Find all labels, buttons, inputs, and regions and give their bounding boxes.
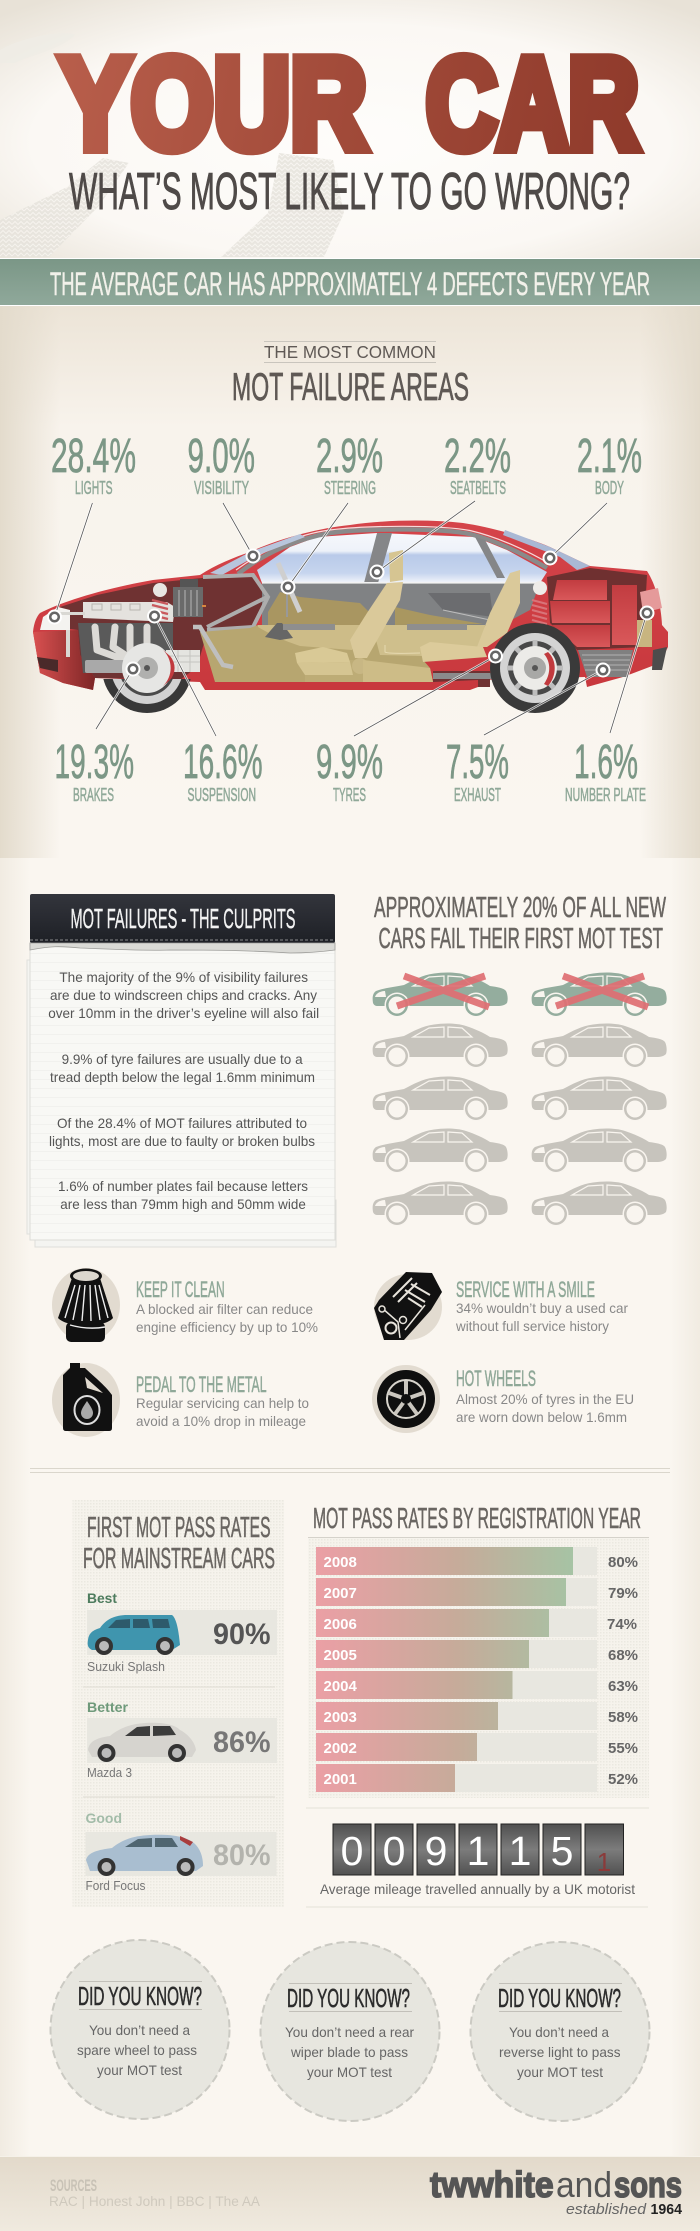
callout: did you know 3: DID YOU KNOW? <box>498 1985 621 2013</box>
bar 2002: 2002 <box>324 1740 357 1757</box>
tip: service with a smile <box>455 1277 628 1334</box>
stat: number plate <box>565 736 646 805</box>
logo: established <box>566 2201 647 2218</box>
stat: seatbelts: SEATBELTS <box>450 478 506 498</box>
tip: keep it clean: KEEP IT CLEAN <box>136 1277 225 1302</box>
callout: did you know 3: You don’t need a <box>509 2024 609 2040</box>
stat: suspension: 16.6% <box>183 736 262 789</box>
panel: first MOT pass rates <box>72 1500 284 1907</box>
callout: did you know 1: You don’t need a <box>89 2022 190 2038</box>
car cutaway illustration <box>33 521 668 713</box>
panel heading <box>83 1512 275 1575</box>
tip: keep it clean: A blocked air filter can reduce <box>136 1301 313 1317</box>
stat: body <box>577 430 642 498</box>
bar 2004: 2004 <box>324 1678 358 1695</box>
tip: hot wheels: are worn down below 1.6mm <box>456 1409 627 1425</box>
odometer: annual mileage: 1 <box>467 1828 489 1874</box>
banner: 4 defects <box>0 258 700 306</box>
stat: visibility <box>188 430 255 498</box>
better: Mazda 3: Mazda 3 <box>87 1765 132 1780</box>
odometer: annual mileage: 1 <box>597 1847 611 1877</box>
bar 2003 <box>316 1702 638 1730</box>
bar 2007: 79% <box>608 1585 638 1602</box>
odometer: annual mileage: 0 <box>341 1828 363 1874</box>
better: Mazda 3 <box>87 1699 277 1780</box>
bar 2004 <box>316 1671 638 1699</box>
logo: sons <box>614 2164 682 2205</box>
culprit text: lights: lights, most are due to faulty or broken bulbs <box>49 1133 315 1149</box>
tip: keep it clean: engine efficiency by up to 10% <box>136 1319 318 1335</box>
callout: did you know 1: spare wheel to pass <box>77 2042 197 2058</box>
bar 2002: 55% <box>608 1740 638 1757</box>
bar chart: pass rates by year <box>308 1537 649 1798</box>
best: Suzuki Splash: 90% <box>213 1618 270 1651</box>
callout: did you know 1 <box>50 1940 230 2119</box>
culprit text: number plates <box>58 1178 308 1212</box>
tip: pedal to the metal: avoid a 10% drop in mileage <box>136 1413 306 1429</box>
stat: steering: STEERING <box>324 478 376 498</box>
bar 2003: 58% <box>608 1709 638 1726</box>
sources <box>49 2176 261 2209</box>
bar 2004: 63% <box>608 1678 638 1695</box>
bar 2002 <box>316 1733 638 1761</box>
better: Mazda 3: Better <box>87 1699 129 1715</box>
tip: service with a smile: without full service history <box>455 1318 609 1334</box>
stat: exhaust: EXHAUST <box>454 785 501 805</box>
odometer: annual mileage: 0 <box>383 1828 405 1874</box>
culprit text: visibility <box>48 969 319 1021</box>
bar 2006: 2006 <box>324 1616 357 1633</box>
callout: did you know 2: DID YOU KNOW? <box>287 1985 410 2013</box>
stat: brakes <box>54 736 134 805</box>
icon: engine <box>374 1272 442 1340</box>
stat: brakes: BRAKES <box>73 785 114 805</box>
culprit text: visibility: over 10mm in the driver’s eyeline will also fail <box>48 1005 319 1021</box>
stat: seatbelts <box>444 430 511 498</box>
bar 2005: 68% <box>608 1647 638 1664</box>
bar 2006 <box>316 1609 637 1637</box>
stat: brakes: 19.3% <box>54 736 134 789</box>
better: Mazda 3: 86% <box>213 1726 270 1759</box>
bar 2001: 52% <box>608 1771 638 1788</box>
culprit text: tyres <box>50 1051 315 1085</box>
stat: lights <box>51 430 136 498</box>
tip: pedal to the metal: PEDAL TO THE METAL <box>136 1372 266 1397</box>
callout: did you know 3: reverse light to pass <box>499 2044 620 2060</box>
stat: body: 2.1% <box>577 430 642 483</box>
odometer: annual mileage: 9 <box>425 1828 447 1874</box>
title: CAR <box>426 32 639 176</box>
culprit text: tyres: tread depth below the legal 1.6mm minimum <box>50 1069 315 1085</box>
bar 2005 <box>316 1640 638 1668</box>
icon: wheel <box>372 1365 440 1433</box>
bar 2007: 2007 <box>324 1585 357 1602</box>
stat: tyres: 9.9% <box>316 736 383 789</box>
title <box>60 32 639 176</box>
best: Suzuki Splash <box>87 1590 277 1674</box>
leader lines <box>54 501 647 736</box>
heading: MOT failure areas: MOT FAILURE AREAS <box>232 366 469 409</box>
callout: did you know 3 <box>470 1942 650 2121</box>
bar 2001 <box>316 1764 638 1792</box>
stat: tyres: TYRES <box>333 785 366 805</box>
culprit text: lights: Of the 28.4% of MOT failures attributed to <box>57 1115 307 1131</box>
heading: 20% of new cars <box>374 892 666 955</box>
bar 2001: 2001 <box>324 1771 357 1788</box>
stat: steering: 2.9% <box>316 430 383 483</box>
heading: the most common: THE MOST COMMON <box>264 342 436 362</box>
icon: air filter <box>52 1268 120 1342</box>
tip: hot wheels: Almost 20% of tyres in the EU <box>456 1391 634 1407</box>
stat: exhaust: 7.5% <box>446 736 509 789</box>
stat: lights: 28.4% <box>51 430 136 483</box>
car markers <box>48 550 654 676</box>
stat: body: BODY <box>595 478 624 498</box>
logo <box>430 2164 683 2218</box>
panel heading: FOR MAINSTREAM CARS <box>83 1543 275 1575</box>
tip: pedal to the metal <box>136 1372 309 1429</box>
callout: did you know 2: your MOT test <box>307 2064 392 2080</box>
panel: MOT failures culprits <box>27 894 336 1247</box>
culprit text: tyres: 9.9% of tyre failures are usually due to a <box>62 1051 303 1067</box>
stat: number plate: 1.6% <box>574 736 638 789</box>
bar 2005: 2005 <box>324 1647 357 1664</box>
good: Ford Focus: 80% <box>213 1839 270 1872</box>
panel header <box>30 894 335 943</box>
tip: service with a smile: 34% wouldn’t buy a used car <box>456 1300 628 1316</box>
culprit text: lights <box>49 1115 315 1149</box>
tyre tracks decoration <box>0 33 344 257</box>
panel header: MOT FAILURES - THE CULPRITS <box>70 903 296 934</box>
odometer: annual mileage <box>333 1824 624 1877</box>
tip: keep it clean <box>136 1277 318 1335</box>
good: Ford Focus <box>86 1810 276 1893</box>
logo: and <box>556 2164 612 2205</box>
culprit text: number plates: are less than 79mm high and 50mm wide <box>60 1196 306 1212</box>
odometer: annual mileage: 5 <box>551 1828 573 1874</box>
stat: suspension <box>183 736 262 805</box>
icon: oil can <box>52 1363 120 1437</box>
sources: SOURCES <box>50 2176 97 2195</box>
sources: RAC | Honest John | BBC | The AA <box>49 2193 261 2209</box>
stat: seatbelts: 2.2% <box>444 430 511 483</box>
logo: twwhite <box>430 2164 554 2205</box>
tip: service with a smile: SERVICE WITH A SMILE <box>456 1277 595 1302</box>
callout: did you know 3: your MOT test <box>517 2064 603 2080</box>
good: Ford Focus: Ford Focus <box>86 1878 146 1893</box>
stat: exhaust <box>446 736 509 805</box>
callout: did you know 1: your MOT test <box>97 2062 182 2078</box>
logo: 1964 <box>650 2201 683 2218</box>
odometer: annual mileage: 1 <box>509 1828 531 1874</box>
bar 2008: 2008 <box>324 1554 357 1571</box>
culprit text: visibility: The majority of the 9% of visibility failures <box>59 969 308 985</box>
stat: number plate: NUMBER PLATE <box>565 785 646 805</box>
best: Suzuki Splash: Suzuki Splash <box>87 1659 165 1674</box>
footer <box>0 2156 700 2231</box>
stat: suspension: SUSPENSION <box>188 785 256 805</box>
title: YOUR <box>60 32 367 176</box>
good: Ford Focus: Good <box>86 1810 122 1826</box>
bar 2007 <box>316 1578 638 1606</box>
callout: did you know 2: You don’t need a rear <box>285 2024 414 2040</box>
panel heading: FIRST MOT PASS RATES <box>87 1512 270 1544</box>
tip: hot wheels <box>456 1366 634 1425</box>
tip: pedal to the metal: Regular servicing can help to <box>136 1395 309 1411</box>
culprit text: number plates: 1.6% of number plates fail because letters <box>58 1178 308 1194</box>
bar 2008 <box>316 1547 638 1575</box>
stat: steering <box>316 430 383 498</box>
callout: did you know 2 <box>260 1942 440 2121</box>
stat: visibility: VISIBILITY <box>194 478 249 498</box>
stat: lights: LIGHTS <box>75 478 112 498</box>
callout: did you know 1: DID YOU KNOW? <box>78 1983 202 2011</box>
callout: did you know 2: wiper blade to pass <box>290 2044 408 2060</box>
stat: visibility: 9.0% <box>188 430 255 483</box>
bar 2006: 74% <box>607 1616 637 1633</box>
stat: tyres <box>316 736 383 805</box>
bar 2008: 80% <box>608 1554 638 1571</box>
culprit text: visibility: are due to windscreen chips and cracks. Any <box>50 987 317 1003</box>
tip: hot wheels: HOT WHEELS <box>456 1366 536 1391</box>
bar 2003: 2003 <box>324 1709 357 1726</box>
pictogram: ten cars, two failed <box>373 973 667 1226</box>
best: Suzuki Splash: Best <box>87 1590 117 1606</box>
odometer caption: Average mileage travelled annually by a UK motorist <box>320 1881 635 1897</box>
